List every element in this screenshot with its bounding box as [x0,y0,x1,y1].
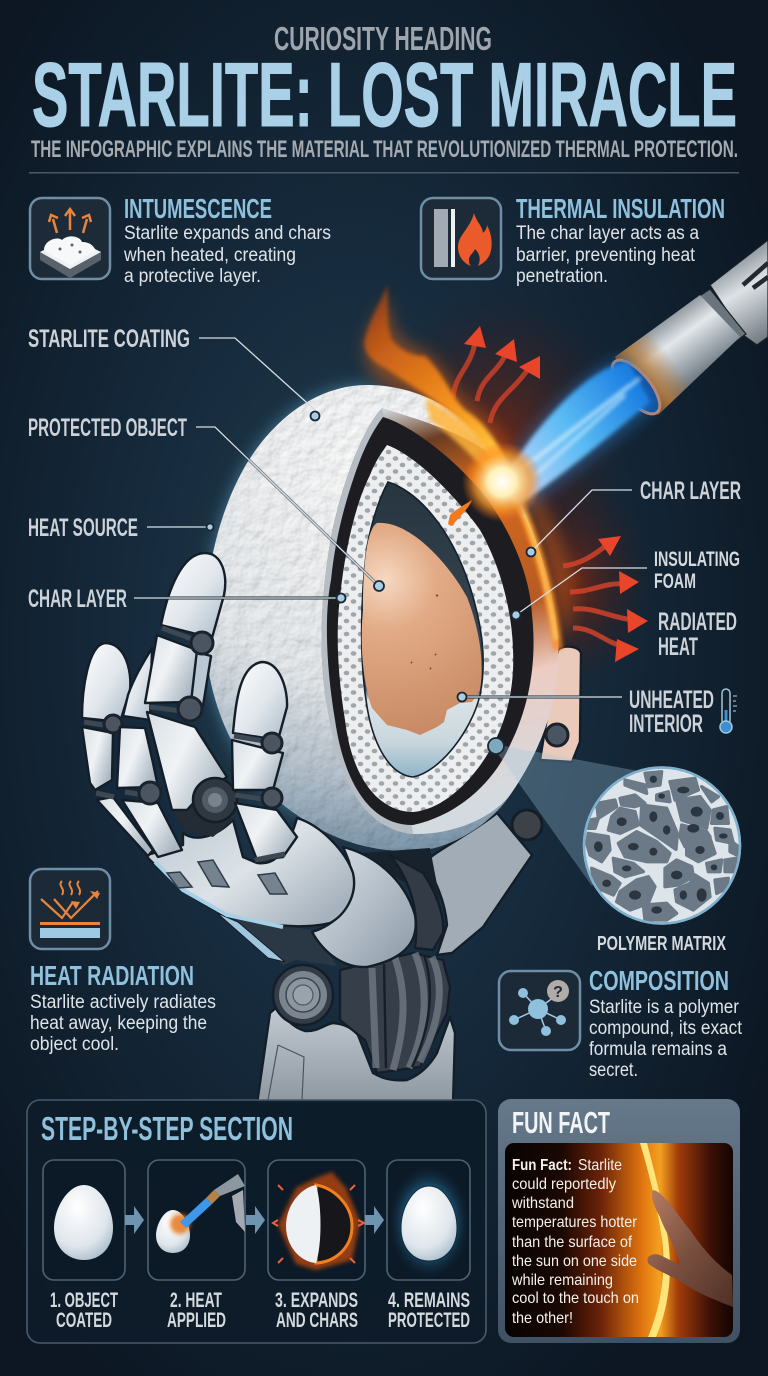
blue flame [498,362,650,505]
body text [123,223,331,287]
icon: barrier and flame [421,198,501,279]
body text: a protective layer. [124,266,261,287]
fun fact text: the other! [512,1310,573,1327]
body text: Starlite is a polymer [589,997,740,1018]
grey cut edge [322,408,413,834]
label: heat source: HEAT SOURCE [28,514,138,542]
icon: reflected heat [30,869,110,949]
egg blue halo [205,385,420,815]
arrow [246,1206,265,1234]
protected egg [362,523,482,735]
step 2 [148,1160,245,1332]
front flame [364,285,558,650]
blowtorch [462,240,768,522]
step 1: COATED [56,1309,112,1332]
label: char layer left: CHAR LAYER [28,585,127,613]
upward radiated heat arrows [453,326,540,423]
label: unheated interior: UNHEATED [629,686,714,714]
step 3: AND CHARS [276,1309,358,1332]
fire image [505,1143,733,1337]
rear finger [540,647,581,762]
index finger [232,662,297,860]
body text: heat away, keeping the [30,1013,207,1034]
body text: Starlite expands and chars [124,223,331,244]
wrist band [390,855,443,950]
forearm segment [312,847,416,967]
outer white coating [205,385,559,851]
heat glow [370,290,630,590]
panel: step-by-step [27,1100,486,1343]
torch head [710,240,768,345]
egg specks [411,595,438,669]
flame glow behind egg [365,300,572,640]
label: insulating foam: FOAM [654,570,696,593]
label: unheated interior [458,686,714,738]
hot spot [462,442,542,522]
robot hand [82,553,443,967]
palm lower highlight [155,862,283,927]
body text: secret. [589,1060,638,1081]
magnified polymer matrix [488,738,740,924]
collar [698,289,746,342]
palm [147,818,354,926]
lattice circle [584,768,740,924]
icon: thermometer [720,689,737,733]
lower arm shell [257,1007,455,1104]
intumescence callout [30,193,331,287]
label: char layer left [28,585,346,613]
fun fact text: could reportedly [512,1176,616,1193]
icon: molecule [499,971,580,1050]
body text: object cool. [30,1034,119,1055]
step 3: 3. EXPANDS [275,1289,358,1312]
fun fact text: the sun on one side [512,1253,637,1270]
side radiated heat arrows [563,536,648,662]
ribbed wrist [340,953,450,1073]
nozzle [615,295,740,415]
blue flame glow [490,358,656,510]
label: protected object [28,414,384,591]
dark mechanism under forearm [235,918,337,966]
fun fact text: temperatures hotter [512,1214,638,1231]
torch mouth [604,353,668,421]
title block [31,20,738,163]
body text [589,997,743,1081]
wrist shadow [360,848,440,900]
side heat glow [500,470,650,690]
body text: The char layer acts as a [516,223,699,244]
label: radiated heat [658,608,737,661]
label: unheated interior: INTERIOR [629,710,703,738]
robot arm base [257,953,455,1104]
icon: molecule: ? [553,984,563,1001]
arrow [125,1206,144,1234]
matrix rim [584,768,740,924]
lattice cells [587,772,738,920]
step 3 [268,1160,365,1332]
insulating foam [338,445,513,812]
magnifier beam [496,745,640,885]
label: radiated heat: HEAT [658,633,698,661]
body text [30,992,216,1055]
fun fact text: cool to the touch on [512,1290,639,1307]
rear arm plate [425,813,532,955]
step 4: PROTECTED [388,1309,470,1332]
palm plates [167,860,287,894]
label: protected object: PROTECTED OBJECT [28,414,187,442]
fun fact text: Starlite [578,1157,622,1174]
icon: expanding layer [30,198,110,279]
rear finger joint [546,724,568,746]
body text: compound, its exact [589,1018,743,1039]
inner cavity [362,482,483,777]
hand [647,1190,733,1307]
label: char layer right [526,477,741,556]
heading: INTUMESCENCE [124,193,272,224]
rear arm joint [512,810,542,840]
char layer [327,417,534,825]
blue under plate [217,913,285,962]
heat radiation callout [30,869,216,1055]
body text [516,223,699,287]
section heading: STEP-BY-STEP SECTION [41,1110,293,1147]
label: starlite coating [28,325,320,420]
panel: fun fact [498,1099,740,1343]
body text: when heated, creating [123,245,296,266]
step 4: 4. REMAINS [388,1289,470,1312]
little finger [82,643,153,856]
step 2: 2. HEAT [170,1289,222,1312]
step 4 [387,1160,470,1332]
body text: formula remains a [589,1039,727,1060]
label: starlite coating: STARLITE COATING [28,325,190,353]
body text: penetration. [516,266,608,287]
composition callout [499,965,743,1081]
label: insulating foam [512,548,740,620]
kicker heading: CURIOSITY HEADING [274,20,492,57]
fun fact text [511,1157,639,1327]
step 1: 1. OBJECT [50,1289,118,1312]
middle finger [145,553,237,837]
thermal insulation callout [421,193,725,287]
crack [448,500,472,526]
fun fact text: Fun Fact: [512,1157,572,1174]
step 2: APPLIED [167,1309,226,1332]
step 1 [43,1160,125,1332]
ring finger [117,648,182,857]
body text: barrier, preventing heat [516,245,696,266]
fun fact text: withstand [511,1195,574,1212]
flame streaks [520,378,640,475]
heading: HEAT RADIATION [30,960,194,991]
body text: Starlite actively radiates [30,992,216,1013]
cut edge band [322,408,559,834]
sample point [488,738,504,754]
arrow [365,1206,384,1234]
heading: FUN FACT [512,1105,610,1140]
fun fact text: while remaining [511,1272,613,1289]
coated egg cross-section [205,385,559,851]
fun fact text: than the surface of [512,1234,633,1251]
ball joint [273,965,333,1025]
